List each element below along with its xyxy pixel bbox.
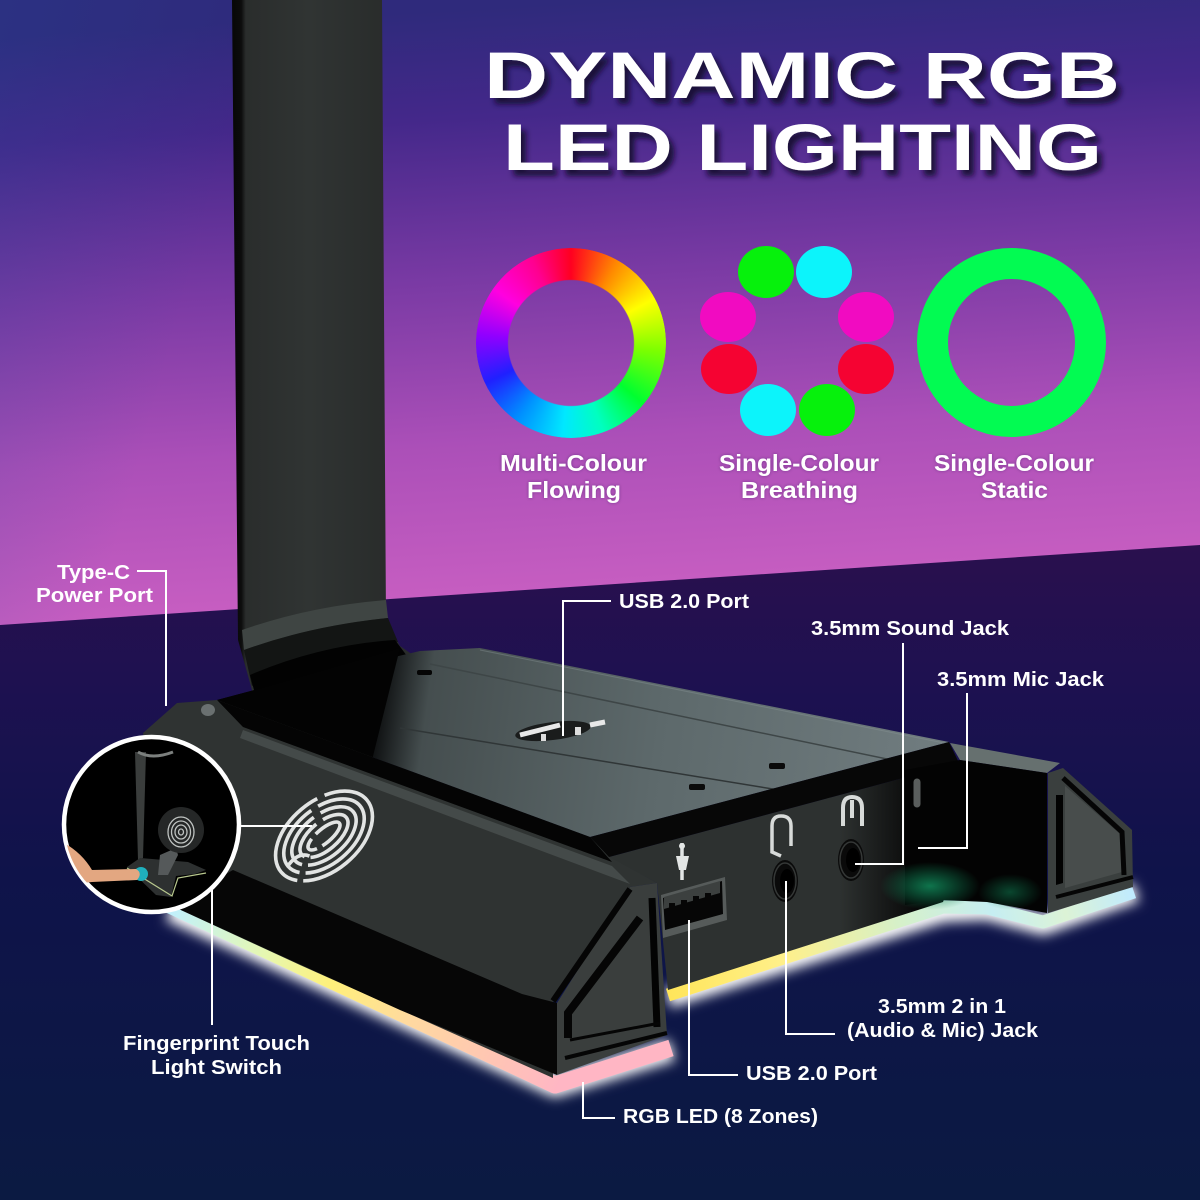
inset fingerprint disc	[158, 807, 204, 875]
label: multi-colour flowing	[500, 450, 647, 503]
label: sound jack: 3.5mm Sound Jack	[811, 617, 1010, 640]
jack: sound	[838, 839, 864, 881]
icon: fingerprint	[259, 773, 389, 899]
icon: single-colour static ring	[932, 264, 1090, 422]
label: single-colour static	[934, 450, 1094, 503]
label: top USB 2.0 port: USB 2.0 Port	[619, 590, 749, 613]
label: single-colour static: Single-Colour	[934, 450, 1094, 476]
label: single-colour breathing: Single-Colour	[719, 450, 879, 476]
icon: single-colour breathing dots	[700, 246, 894, 436]
stand base: port face	[590, 742, 959, 990]
label: single-colour breathing: Breathing	[741, 477, 858, 503]
screw hole	[769, 763, 785, 769]
USB port	[661, 877, 727, 938]
right recess and rear end cap	[880, 743, 1133, 913]
stand base: top plane	[217, 648, 949, 837]
icon: headphones	[843, 797, 862, 826]
LED glow strip under the stand	[170, 892, 1136, 1086]
background: purple gradient wall	[0, 0, 1200, 640]
icon: multi-colour flowing ring	[476, 248, 666, 438]
label: RGB LED: RGB LED (8 Zones)	[623, 1105, 818, 1128]
icon: headset with mic	[772, 816, 791, 856]
label: type-c power port: Power Port	[36, 584, 153, 607]
label: type-c power port	[36, 561, 153, 607]
label: mic jack: 3.5mm Mic Jack	[937, 668, 1105, 691]
front end cap of the base	[553, 883, 667, 1075]
label: fingerprint touch light switch: Fingerprint Touch	[123, 1032, 310, 1055]
title: DYNAMIC RGB	[484, 38, 1120, 112]
label: 2 in 1 jack: 3.5mm 2 in 1	[878, 995, 1006, 1018]
inset mini stand	[127, 752, 206, 897]
inset hand with finger	[67, 844, 148, 882]
callout: fingerprint touch inset circle	[58, 737, 239, 912]
screw hole	[417, 670, 432, 675]
label: 2 in 1 jack	[847, 995, 1039, 1042]
label: fingerprint touch light switch	[123, 1032, 310, 1079]
label: multi-colour flowing: Multi-Colour	[500, 450, 647, 476]
label: type-c power port: Type-C	[57, 561, 130, 584]
label: single-colour breathing	[719, 450, 879, 503]
background: dark floor	[0, 545, 1200, 1200]
stand base: left side face	[143, 700, 657, 1078]
icon: microphone	[914, 782, 920, 804]
logo on base	[514, 717, 605, 745]
label: single-colour static: Static	[981, 477, 1048, 503]
jack: 2 in 1	[772, 860, 798, 902]
title	[484, 38, 1120, 184]
label: fingerprint touch light switch: Light Switch	[151, 1056, 282, 1079]
label: lower USB 2.0 port: USB 2.0 Port	[746, 1062, 877, 1085]
screw hole	[689, 784, 705, 790]
leader lines	[137, 571, 967, 1118]
headset stand upright post	[232, 0, 420, 740]
title: LED LIGHTING	[503, 110, 1102, 184]
label: multi-colour flowing: Flowing	[527, 477, 621, 503]
label: 2 in 1 jack: (Audio & Mic) Jack	[847, 1019, 1039, 1042]
icon: USB symbol	[676, 843, 689, 880]
